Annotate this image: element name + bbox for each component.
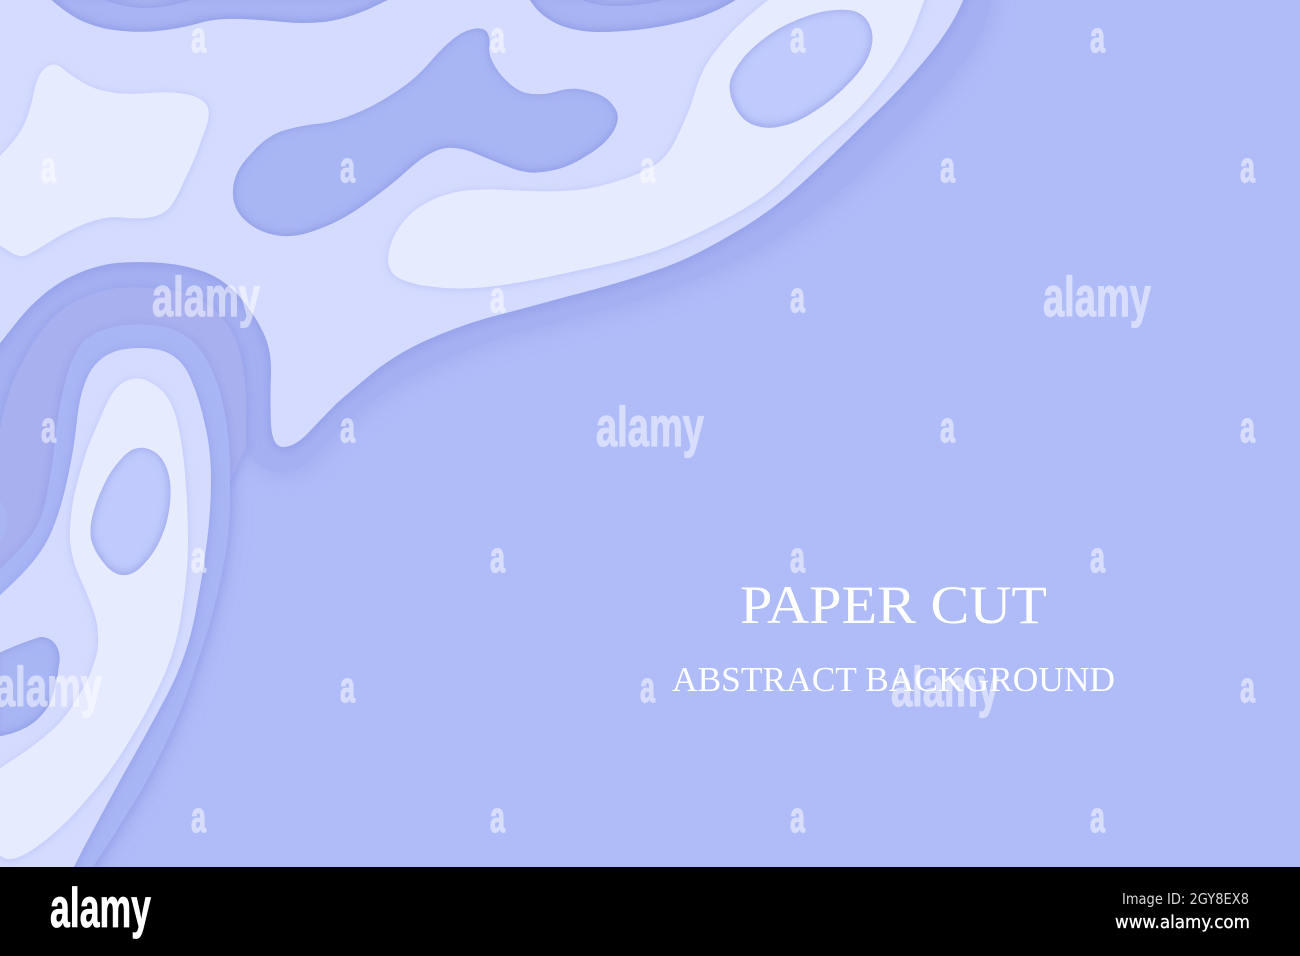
watermark pattern: a	[790, 273, 805, 322]
white winding paper band	[388, 0, 930, 288]
arch layer: third ring	[0, 324, 230, 885]
top centre inner cutout	[572, 0, 680, 6]
watermark pattern: a	[1240, 663, 1255, 712]
watermark pattern: a	[790, 533, 805, 582]
top centre dark cutout	[527, 0, 743, 32]
small lower left dark cutout	[0, 637, 60, 737]
watermark pattern: a	[490, 793, 505, 842]
top left inner cutout	[89, 0, 207, 8]
watermark pattern: a	[640, 143, 655, 192]
watermark pattern: a	[191, 533, 206, 582]
watermark pattern: a	[1240, 403, 1255, 452]
watermark pattern: a	[340, 663, 355, 712]
white star shaped paper	[0, 64, 209, 256]
lower white paper shape	[0, 378, 188, 859]
watermark pattern: a	[41, 143, 56, 192]
watermark pattern: a	[41, 403, 56, 452]
main light paper layer	[0, 0, 972, 447]
website: www.alamy.com	[1115, 912, 1250, 933]
watermark pattern: alamy	[152, 265, 260, 328]
watermark pattern: a	[191, 13, 206, 62]
outer dark band layer	[0, 0, 998, 885]
arch layer: left edge bump	[0, 495, 8, 548]
footer bar	[0, 867, 1300, 956]
watermark pattern: a	[790, 13, 805, 62]
paper cut layers	[0, 0, 998, 885]
watermark pattern: a	[490, 273, 505, 322]
watermark pattern: alamy	[596, 395, 704, 458]
watermark pattern: a	[340, 403, 355, 452]
footer logo: alamy	[50, 876, 151, 939]
large dark blob cutout	[233, 28, 618, 236]
watermark pattern: a	[640, 663, 655, 712]
watermark pattern: a	[790, 793, 805, 842]
watermark pattern: alamy	[891, 655, 999, 718]
watermark pattern: alamy	[1043, 265, 1151, 328]
image id: Image ID: 2GY8EX8	[1122, 890, 1249, 908]
watermark pattern: a	[340, 143, 355, 192]
watermark pattern: a	[490, 533, 505, 582]
title: paper cut: PAPER CUT	[740, 575, 1047, 635]
lower oval cutout	[90, 448, 171, 575]
watermark pattern: a	[1090, 793, 1105, 842]
watermark pattern: a	[1240, 143, 1255, 192]
watermark pattern: a	[1090, 13, 1105, 62]
watermark pattern: a	[940, 143, 955, 192]
subtitle: abstract background: ABSTRACT BACKGROUND	[672, 660, 1115, 699]
top left dark cutout	[46, 0, 398, 32]
arch layer: second ring	[0, 287, 246, 600]
watermark pattern: a	[490, 13, 505, 62]
watermark pattern: a	[1090, 533, 1105, 582]
top right oval cutout	[730, 10, 872, 128]
watermark pattern: a	[940, 403, 955, 452]
lower light paper layer	[0, 348, 211, 885]
watermark pattern: a	[191, 793, 206, 842]
